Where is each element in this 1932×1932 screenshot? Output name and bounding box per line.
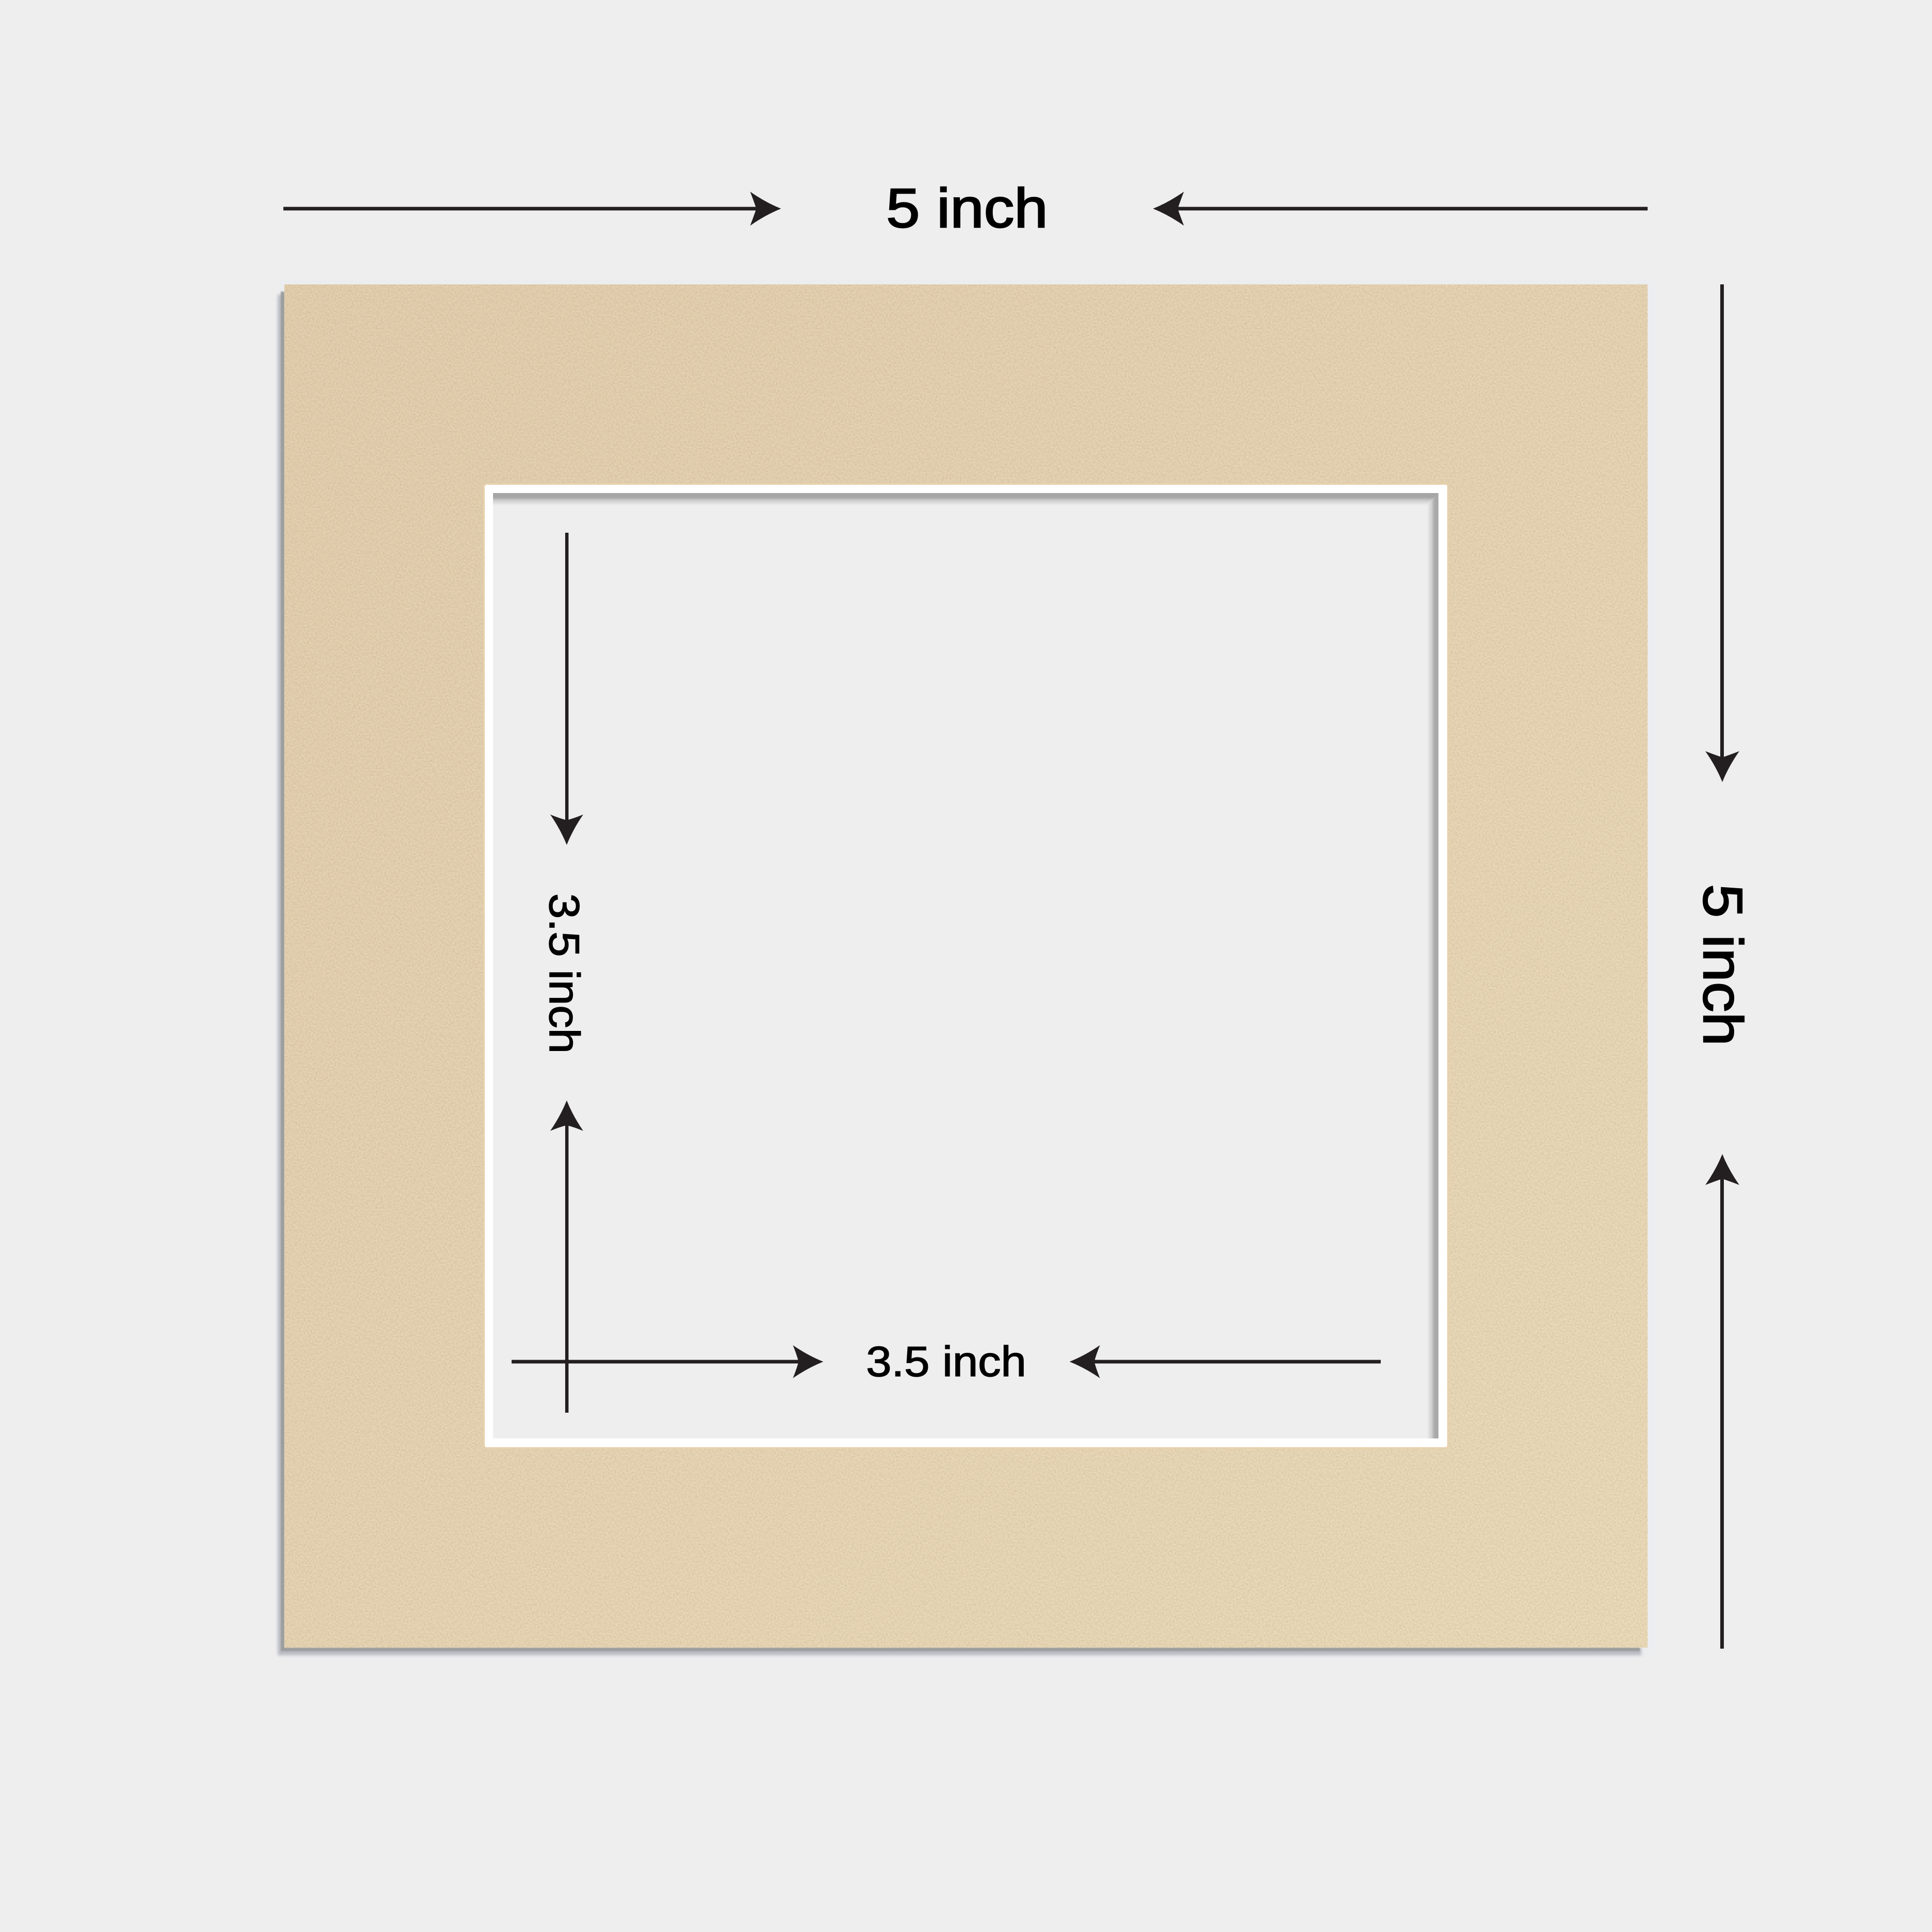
arrow: right height, pointing down (1705, 284, 1739, 782)
heading: outer width label: 5 inch (886, 177, 1048, 239)
arrow: top width, pointing right (283, 192, 781, 226)
heading: outer height label: 5 inch (1692, 884, 1754, 1046)
label: inner height: 3.5 inch (540, 893, 588, 1054)
arrow: inner width, pointing left (1070, 1345, 1381, 1378)
mat paper grain (284, 284, 1648, 1648)
mat board (284, 284, 1648, 1648)
window top inner shadow (493, 493, 1438, 505)
mat hard drop shadow (281, 292, 1640, 1651)
arrow: inner height, pointing down (550, 533, 583, 845)
label: inner width: 3.5 inch (866, 1337, 1026, 1385)
mat edge glow (278, 278, 1656, 1656)
arrow: inner width, pointing right (512, 1345, 823, 1378)
panel: beige photo mat with window (278, 278, 1656, 1656)
window bevel (484, 484, 1448, 1448)
window right inner shadow (1427, 493, 1438, 1438)
window opening (493, 493, 1438, 1438)
arrow: inner height, pointing up (550, 1100, 583, 1413)
arrow: top width, pointing left (1153, 192, 1648, 226)
mat soft drop shadow (278, 295, 1641, 1655)
arrow: right height, pointing up (1705, 1154, 1739, 1649)
